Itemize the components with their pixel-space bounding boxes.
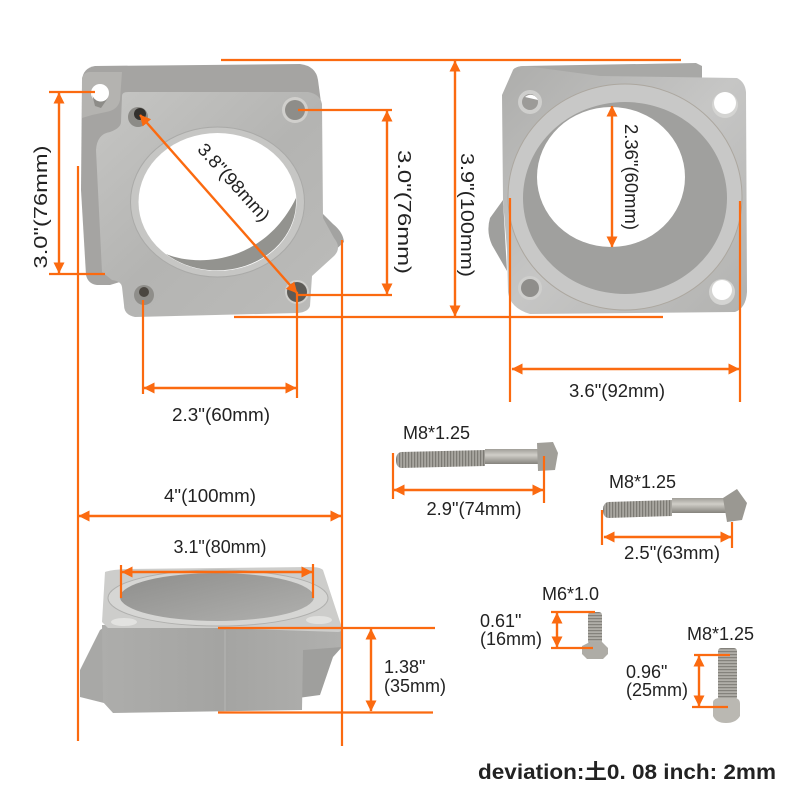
label: M8*1.25 socket bolt: (25mm): [626, 680, 688, 700]
label: M6*1.0 short bolt: (16mm): [480, 629, 542, 649]
dimension: body width 4 in: [78, 166, 342, 746]
dimension: diagonal bolt spacing 3.8 in: [140, 115, 297, 293]
label: M8*1.25 medium bolt: M8*1.25: [609, 472, 676, 492]
dimension: height 1.38 in: (35mm): [384, 676, 446, 696]
dimension: body width 4 in: 4"(100mm): [164, 486, 256, 506]
photo: long bolt: [396, 442, 558, 471]
dimension: tab hole spacing 3.0 in: [31, 92, 105, 274]
label: M8*1.25 long bolt: [393, 423, 544, 519]
dimension: bolt spacing 3.0 in: [297, 110, 414, 295]
footnote: deviation tolerance: deviation:土0. 08 inch: 2mm: [478, 761, 776, 784]
dimension: flange top and bottom extension lines: [221, 60, 681, 317]
label: M8*1.25 socket bolt: 0.96": [626, 662, 667, 682]
photo: medium bolt: [603, 489, 747, 522]
photo: short hex bolt: [582, 612, 608, 659]
label: M8*1.25 long bolt: 2.9"(74mm): [426, 499, 522, 519]
photo: throttle adapter, flange side: [81, 64, 344, 317]
dimension: bolt spacing 2.3 in: [143, 292, 297, 425]
label: M8*1.25 socket bolt: [626, 624, 754, 707]
dimension: tab hole spacing 3.0 in: 3.0"(76mm): [31, 146, 51, 268]
dimension: ring width 3.6 in: [510, 198, 740, 402]
dimension: top bore 3.1 in: 3.1"(80mm): [174, 537, 266, 557]
photo: throttle adapter, side view: [80, 567, 342, 713]
dimension: top bore 3.1 in: [121, 537, 313, 598]
dimension: bore 2.36 in: 2.36"(60mm): [621, 124, 641, 230]
label: M6*1.0 short bolt: M6*1.0: [542, 584, 599, 604]
dimension: bolt spacing 2.3 in: 2.3"(60mm): [172, 405, 270, 425]
dimension: bolt spacing 3.0 in: 3.0"(76mm): [394, 150, 414, 274]
label: M6*1.0 short bolt: 0.61": [480, 611, 521, 631]
photo: throttle adapter, tapered side: [488, 63, 747, 314]
label: M8*1.25 socket bolt: M8*1.25: [687, 624, 754, 644]
label: M6*1.0 short bolt: [480, 584, 599, 649]
label: M8*1.25 medium bolt: [602, 472, 732, 563]
dimension: overall height 3.9 in: 3.9"(100mm): [457, 153, 477, 277]
label: M8*1.25 long bolt: M8*1.25: [403, 423, 470, 443]
dimension: ring width 3.6 in: 3.6"(92mm): [569, 381, 665, 401]
dimension: height 1.38 in: [218, 628, 446, 712]
dimension: diagonal bolt spacing 3.8 in: 3.8"(98mm): [194, 139, 274, 225]
photo: socket head bolt: [713, 648, 740, 723]
label: M8*1.25 medium bolt: 2.5"(63mm): [624, 543, 720, 563]
dimension: height 1.38 in: 1.38": [384, 657, 425, 677]
